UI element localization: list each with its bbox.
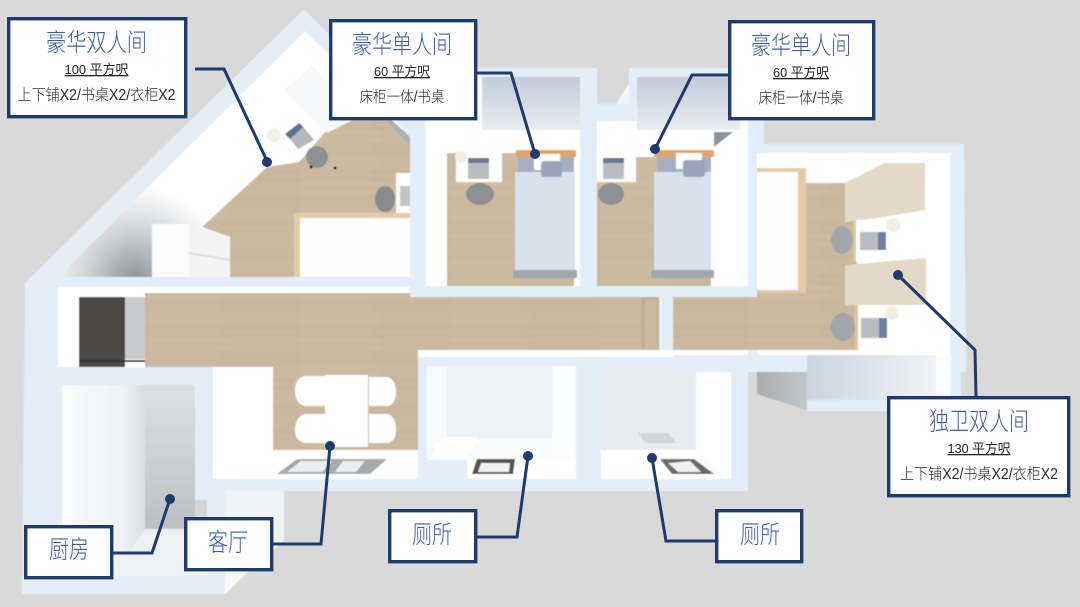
desk and chair lower [375,173,410,213]
label: living room [186,519,272,570]
leader: luxury single right [650,75,728,154]
bathroom two [601,366,731,479]
leader: living room [273,441,335,544]
room: bathrooms [418,350,748,491]
desk and chair upper [267,65,353,170]
wardrobe [152,224,230,277]
room: luxury double [58,31,410,277]
leader: kitchen [113,494,175,553]
bed [513,150,577,278]
callout: luxury double [9,19,186,117]
gray exterior wedge [757,372,807,410]
upper wardrobe [845,163,925,222]
corridor [58,277,757,450]
callout: ensuite double: 独卫双人间 [929,408,1029,436]
callout: ensuite double: 上下铺X2/书桌X2/衣柜X2 [900,465,1058,483]
bathroom one [427,366,578,491]
label: kitchen [26,527,112,578]
room: luxury single B [580,68,748,297]
label: toilet left: 厕所 [412,521,452,549]
callout: ensuite double [889,398,1069,496]
leader: luxury double [195,69,272,167]
leader: toilet left [477,451,533,537]
lower wardrobe [845,258,926,305]
leader: toilet right [647,453,715,541]
room: living room [213,367,418,491]
desk [597,150,636,205]
label: kitchen: 厨房 [49,536,89,564]
callout: luxury single right: 60 平方呎 [773,65,829,80]
room: luxury single A [410,77,580,297]
callout: luxury single left [331,21,476,119]
bed [757,168,806,293]
label: toilet left [390,511,476,562]
bed [651,150,714,278]
room: kitchen [58,367,213,594]
label: toilet right: 厕所 [740,521,780,549]
callout: luxury single right: 床柜一体/书桌 [758,89,844,107]
bed [294,213,410,277]
label: toilet right [717,511,802,562]
callout: luxury double: 豪华双人间 [46,29,147,57]
leader: luxury single left [477,73,540,159]
lower desk and chair [831,305,899,350]
callout: luxury single left: 豪华单人间 [352,31,452,59]
wardrobe dark [79,297,145,370]
callout: luxury double: 100 平方呎 [64,62,128,77]
floor vent [277,459,387,474]
dining table and chairs [295,375,396,447]
desk [455,150,502,205]
upper desk and chair [831,218,900,262]
callout: luxury double: 上下铺X2/书桌X2/衣柜X2 [18,86,176,104]
callout: luxury single right [730,22,874,119]
callout: ensuite double: 130 平方呎 [948,441,1010,456]
room: ensuite double [673,153,951,400]
callout: luxury single left: 床柜一体/书桌 [360,88,444,106]
label: living room: 客厅 [208,529,248,557]
callout: luxury single left: 60 平方呎 [374,64,430,79]
callout: luxury single right: 豪华单人间 [751,32,851,60]
leader: ensuite double [893,270,976,396]
